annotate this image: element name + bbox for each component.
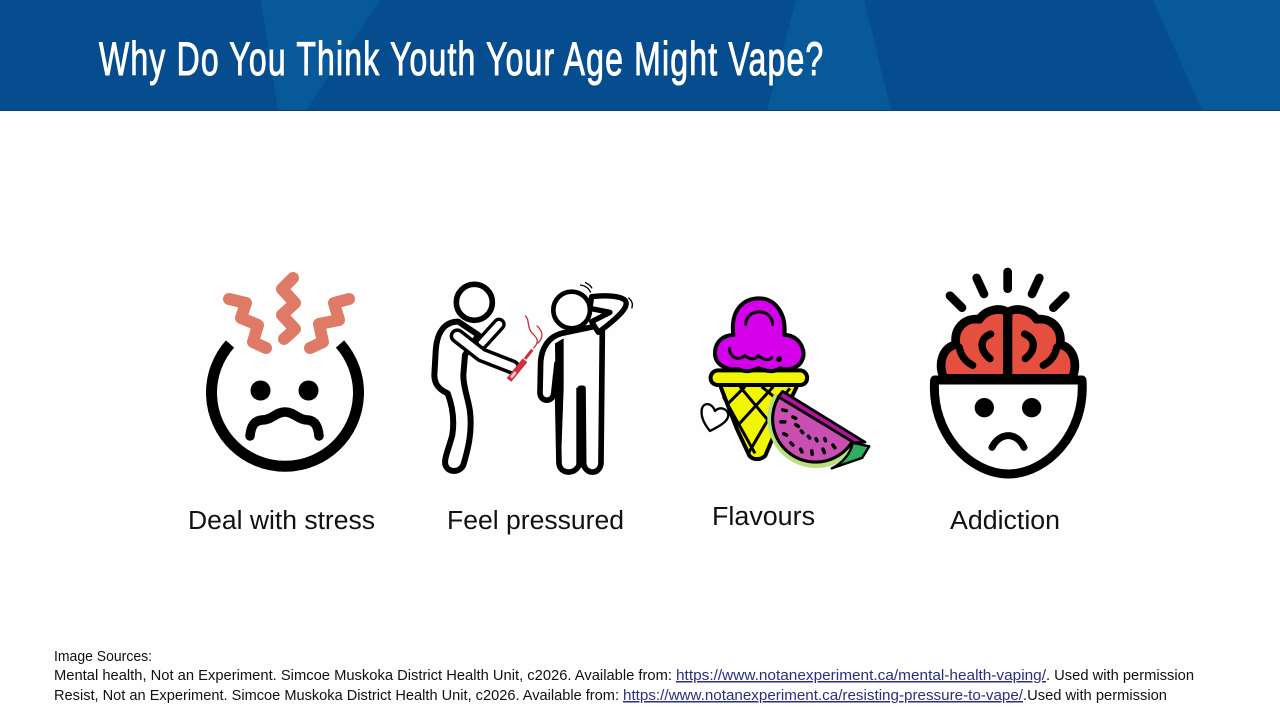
title: Why Do You Think Youth Your Age Might Vape? <box>99 33 823 86</box>
watermelon slice <box>767 391 869 468</box>
label: deal with stress: Deal with stress <box>188 507 375 535</box>
image sources footnote: Image Sources: <box>54 648 152 665</box>
image sources footnote: https://www.notanexperiment.ca/resisting-pressure-to-vape/ <box>623 687 1024 704</box>
rays <box>950 272 1065 308</box>
image sources footnote: .Used with permission <box>1023 687 1167 704</box>
image sources footnote <box>54 648 1194 704</box>
icon: brain face <box>934 272 1082 474</box>
image sources footnote: . Used with permission <box>1046 667 1194 684</box>
ice cream scoop <box>715 298 804 371</box>
label: addiction: Addiction <box>950 507 1060 535</box>
head with sad face <box>934 380 1082 474</box>
header banner <box>0 0 1280 111</box>
left figure <box>434 284 512 471</box>
brain <box>941 309 1075 378</box>
cone <box>711 370 807 459</box>
image sources footnote: https://www.notanexperiment.ca/mental-health-vaping/ <box>676 667 1047 684</box>
icon: peer pressure figures <box>434 282 632 472</box>
icon: stressed face <box>212 278 358 466</box>
heart <box>702 404 728 431</box>
icon: ice cream and watermelon <box>702 298 869 468</box>
label: flavours: Flavours <box>712 503 815 531</box>
image sources footnote: Resist, Not an Experiment. Simcoe Muskoka District Health Unit, c2026. Available from: <box>54 687 619 704</box>
image sources footnote: Mental health, Not an Experiment. Simcoe Muskoka District Health Unit, c2026. Available from: <box>54 667 672 684</box>
vape device and vapour <box>509 316 542 380</box>
label: feel pressured: Feel pressured <box>447 507 624 535</box>
right figure <box>540 282 632 472</box>
